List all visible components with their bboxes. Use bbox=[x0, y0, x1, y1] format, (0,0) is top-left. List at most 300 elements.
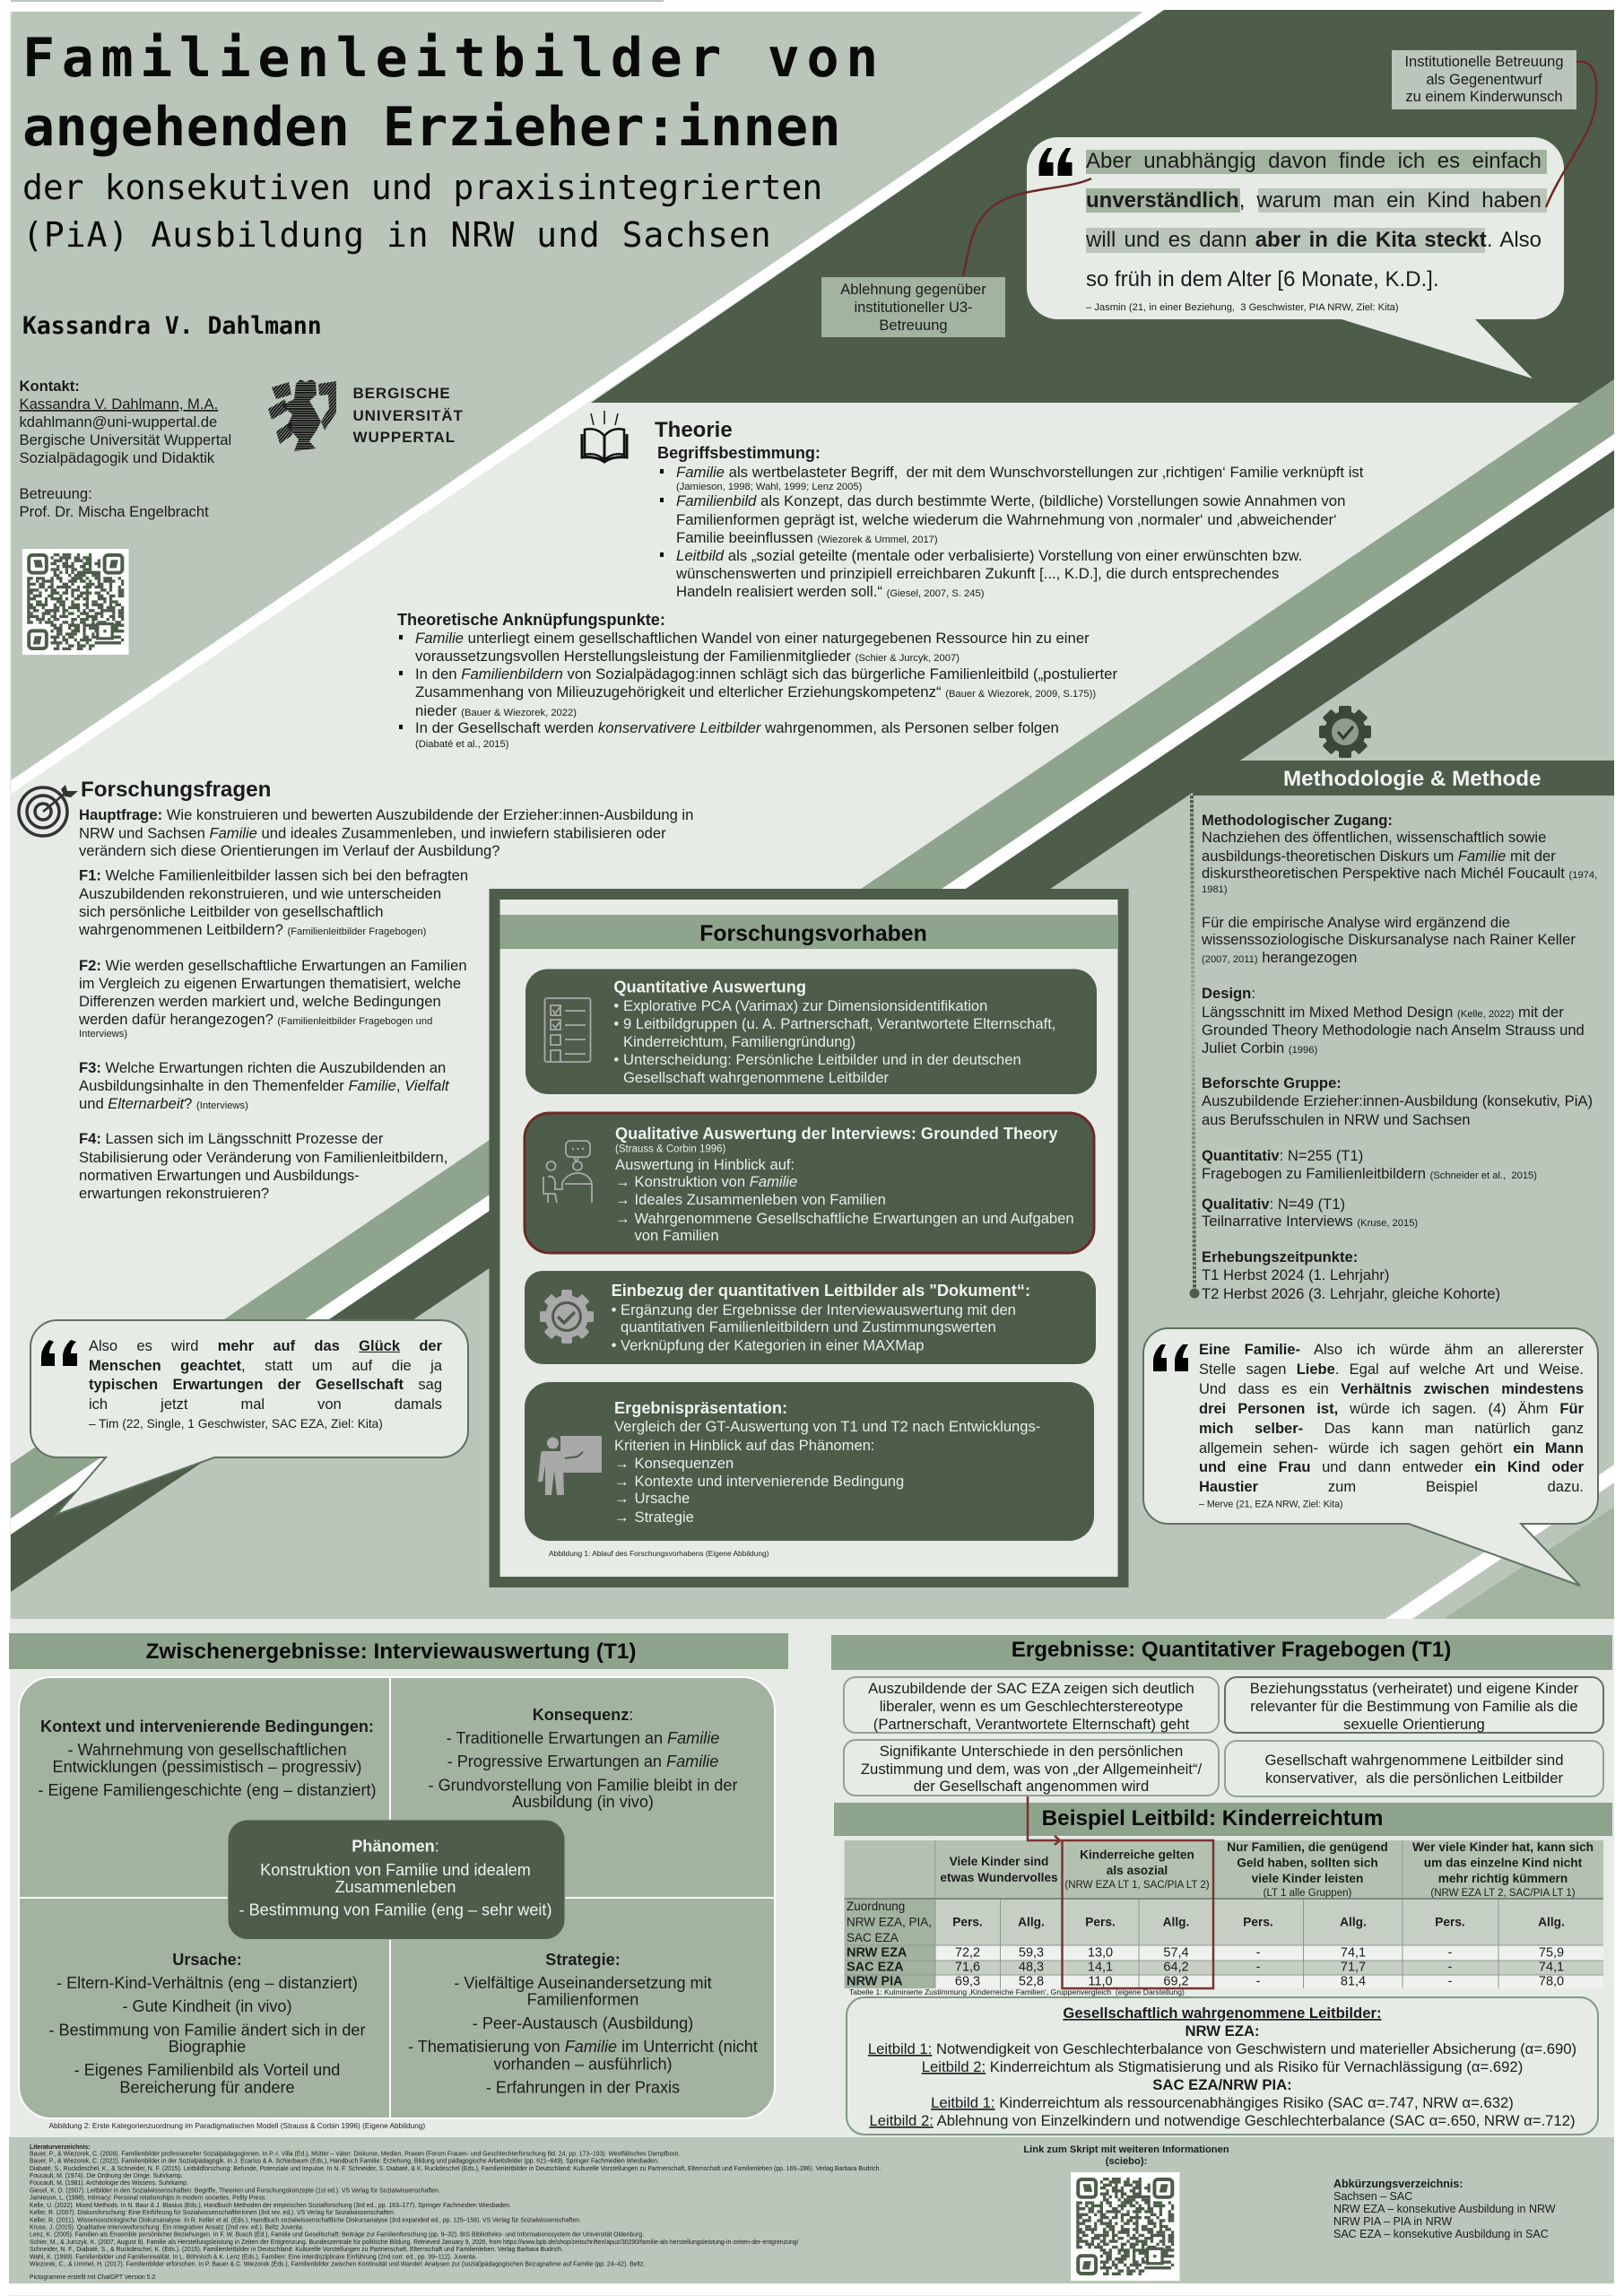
annotation: Ablehnung U3-Betreuung bbox=[821, 277, 1005, 337]
box: Quantitative Auswertung: Gesellschaft wahrgenommene Leitbilder bbox=[623, 1069, 890, 1086]
panel: Methodologie text: Qualitativ: N=49 (T1) bbox=[1202, 1196, 1345, 1213]
panel: Forschungsfragen: wahrgenommenen Leitbildern? (Familienleitbilder Fragebogen) bbox=[78, 921, 427, 938]
heading: Beispiel Leitbild bbox=[834, 1803, 1612, 1836]
box: Qualitative Auswertung: → bbox=[615, 1173, 630, 1190]
quote bubble: Jasmin: – Jasmin (21, in einer Beziehung, 3 Geschwister, PIA NRW, Ziel: Kita) bbox=[1086, 302, 1399, 313]
panel: Ergebnisse Quantitativer Fragebogen bbox=[831, 1635, 1612, 1796]
finding box B: sexuelle Orientierung bbox=[1343, 1716, 1485, 1733]
box: Quantitative Auswertung: Explorative PCA (Varimax) zur Dimensionsidentifikation bbox=[623, 997, 987, 1014]
box: Ergebnispräsentation: → bbox=[614, 1473, 630, 1490]
table: Kinderreichtum: etwas Wundervolles bbox=[940, 1871, 1058, 1884]
box: Einbezug: quantitativen Familienleitbildern und Zustimmungswerten bbox=[621, 1318, 996, 1335]
arrow: box C to highlighted column bbox=[1028, 1796, 1060, 1845]
table: Kinderreichtum: 69,3 bbox=[955, 1975, 980, 1989]
table: Kinderreichtum: Allg. bbox=[1538, 1916, 1565, 1929]
table: Kinderreichtum: Kinderreiche gelten bbox=[1080, 1848, 1194, 1862]
logo wordmark bbox=[353, 385, 464, 446]
panel: Forschungsfragen: sich persönliche Leitbilder von gesellschaftlich bbox=[79, 903, 383, 920]
quadrant: Kontext: Kontext und intervenierende Bedingungen: bbox=[40, 1718, 374, 1735]
panel: Methodologie text: (2007, 2011) herangezogen bbox=[1202, 949, 1357, 966]
quote bubble: Merve: Und dass es ein Verhältnis zwischen mindestens bbox=[1199, 1381, 1584, 1397]
footer: link heading: (sciebo): bbox=[1106, 2156, 1147, 2167]
panel: Theorie: Begriffsbestimmung: bbox=[657, 444, 821, 462]
quote bubble: Tim: ich jetzt mal von damals bbox=[89, 1396, 442, 1413]
panel: Forschungsfragen: normativen Erwartungen und Ausbildungs- bbox=[79, 1167, 360, 1184]
footer: Abkürzungsverzeichnis bbox=[1333, 2178, 1556, 2240]
box: Quantitative Auswertung: • bbox=[613, 1015, 623, 1032]
panel: Forschungsfragen: Stabilisierung oder Veränderung von Familienleitbildern, bbox=[79, 1149, 447, 1166]
centre box: Phänomen: Konstruktion von Familie und idealem bbox=[260, 1861, 531, 1879]
quadrant: Strategie bbox=[408, 1951, 758, 2097]
footer: Abkürzungsverzeichnis: Sachsen – SAC bbox=[1333, 2190, 1412, 2203]
logo wordmark: WUPPERTAL bbox=[353, 429, 456, 446]
panel: Methodologie text: Erhebungszeitpunkte: bbox=[1202, 1248, 1358, 1265]
title bbox=[22, 27, 885, 255]
centre box: Phänomen bbox=[228, 1820, 565, 1939]
table: Kinderreichtum: 74,1 bbox=[1539, 1961, 1564, 1975]
panel: Forschungsfragen: Ausbildungsinhalte in den Themenfelder Familie, Vielfalt bbox=[79, 1077, 450, 1094]
box: Ergebnispräsentation: Ursache bbox=[635, 1490, 690, 1507]
title: angehenden Erzieher:innen bbox=[22, 96, 841, 159]
box: Qualitative Auswertung bbox=[525, 1113, 1094, 1253]
table: Kinderreichtum: 71,7 bbox=[1341, 1961, 1366, 1975]
panel: Theorie: Familie beeinflussen (Wiezorek & Ummel, 2017) bbox=[676, 529, 938, 546]
quadrant: Kontext bbox=[38, 1718, 377, 1799]
box: Qualitative Auswertung: Qualitative Auswertung der Interviews: Grounded Theory bbox=[615, 1125, 1058, 1143]
caption: Tabelle 1: Tabelle 1: Kulminierte Zustimmung ‚Kinderreiche Familien‘, Gruppenvergleich (eigene Darstellung) bbox=[849, 1987, 1185, 1996]
panel: Theorie: Handeln realisiert werden soll.“ (Giesel, 2007, S. 245) bbox=[676, 583, 985, 600]
box: Quantitative Auswertung: Quantitative Auswertung bbox=[613, 978, 806, 996]
icon: target bbox=[19, 785, 78, 836]
panel: Methodologie text: Quantitativ: N=255 (T1) bbox=[1202, 1147, 1363, 1164]
quadrant: Konsequenz: - Progressive Erwartungen an Familie bbox=[447, 1752, 718, 1770]
quote bubble: Merve: – Merve (21, EZA NRW, Ziel: Kita) bbox=[1199, 1500, 1343, 1510]
annotation: Institutionelle Betreuung: Institutionelle Betreuung bbox=[1404, 54, 1564, 70]
panel: Forschungsvorhaben: Forschungsvorhaben bbox=[699, 922, 927, 946]
contact block: Bergische Universität Wuppertal bbox=[20, 431, 231, 448]
centre box: Phänomen: Phänomen: bbox=[352, 1837, 439, 1855]
text block: Theoretische Anknüpfungspunkte: voraussetzungsvollen Herstellungsleistung der Familienmitglieder (Schier & Jurcyk, 2007) bbox=[415, 648, 960, 665]
table: Kinderreichtum: - bbox=[1256, 1975, 1261, 1989]
table: Kinderreichtum: als asozial bbox=[1107, 1864, 1168, 1877]
footer: link heading bbox=[1023, 2144, 1229, 2167]
quadrant: Strategie: vorhanden – ausführlich) bbox=[493, 2056, 673, 2074]
quadrant: Ursache: - Eigenes Familienbild als Vorteil und bbox=[74, 2061, 340, 2079]
annotation: Ablehnung U3-Betreuung: Betreuung bbox=[879, 317, 948, 334]
finding box D: Gesellschaft wahrgenommene Leitbilder sind bbox=[1264, 1752, 1564, 1769]
quadrant: Ursache: Biographie bbox=[169, 2038, 246, 2056]
box: Qualitative Auswertung: von Familien bbox=[635, 1227, 719, 1244]
footer: Literaturverzeichnis: Bauer, P., & Wiezorek, C. (2022). Familienbilder in der Sozialpädagogik. In J. Ecarius & A. Schierbaum (Eds.), Handbuch Familie: Erziehung, Bildung und pädagogische Arbeitsfelder (pp. 621–649). Springer Fachmedien Wiesbaden. bbox=[30, 2159, 659, 2165]
footer: Literaturverzeichnis: Bauer, P., & Wiezorek, C. (2009). Familienbilder professioneller Sozialpädagoginnen. In P.-I. Villa (Ed.), Mütter – Väter: Diskurse, Medien, Praxen (Forum Frauen- und Geschlechterforschung Bd. 24, pp. 173–193). Westfälisches Dampfboot. bbox=[30, 2151, 680, 2157]
box: Einbezug: Verknüpfung der Kategorien in einer MAXMap bbox=[621, 1336, 925, 1354]
box: Qualitative Auswertung: Ideales Zusammenleben von Familien bbox=[635, 1191, 886, 1208]
panel: Theorie bbox=[582, 411, 1364, 600]
footer: link heading: Link zum Skript mit weiteren Informationen bbox=[1023, 2144, 1229, 2155]
box: Ergebnispräsentation: Konsequenzen bbox=[635, 1455, 734, 1472]
panel: Methodologie text: diskurstheoretischen Perspektive nach Michél Foucault (1974, bbox=[1202, 865, 1597, 882]
annotation: Ablehnung U3-Betreuung: Ablehnung gegenüber bbox=[840, 282, 986, 298]
panel: Forschungsfragen: F3: Welche Erwartungen richten die Auszubildenden an bbox=[79, 1059, 446, 1076]
table: Kinderreichtum: 75,9 bbox=[1539, 1946, 1564, 1961]
panel: Gesellschaftlich wahrgenommene Leitbilder: Leitbild 1: Kinderreichtum als ressourcenabhängiges Risiko (SAC α=.747, NRW α=.632) bbox=[931, 2094, 1514, 2111]
panel: Forschungsfragen: F4: Lassen sich im Längsschnitt Prozesse der bbox=[79, 1130, 384, 1147]
table: Kinderreichtum: Viele Kinder sind bbox=[950, 1855, 1048, 1868]
finding box D: konservativer, als die persönlichen Leitbilder bbox=[1265, 1770, 1563, 1787]
table: Kinderreichtum: mehr richtig kümmern bbox=[1438, 1872, 1568, 1885]
panel: Gesellschaftlich wahrgenommene Leitbilder: SAC EZA/NRW PIA: bbox=[1152, 2076, 1292, 2093]
finding box A: (Partnerschaft, Verantwortete Elternschaft) geht bbox=[873, 1716, 1190, 1733]
box: Einbezug bbox=[525, 1271, 1096, 1364]
panel: Forschungsfragen: Differenzen werden markiert und, welche Bedingungen bbox=[79, 993, 441, 1010]
text block: Theoretische Anknüpfungspunkte: In den Familienbildern von Sozialpädagog:innen schlägt sich das bürgerliche Familienleitbild („postulierter bbox=[415, 665, 1117, 683]
table: Kinderreichtum: NRW PIA bbox=[847, 1975, 903, 1989]
finding box B bbox=[1225, 1677, 1603, 1733]
quadrant: Strategie: - Peer-Austausch (Ausbildung) bbox=[473, 2014, 693, 2032]
caption: Abbildung 2: Abbildung 2: Erste Kategorienzuordnung im Paradigmatischen Modell (Strauss & Corbin 1996) (Eigene Abbildung) bbox=[48, 2121, 425, 2130]
box: Einbezug: • bbox=[612, 1301, 617, 1318]
finding box D bbox=[1225, 1741, 1603, 1796]
table: Kinderreichtum: Geld haben, sollten sich bbox=[1237, 1857, 1378, 1870]
quadrant: Konsequenz: Ausbildung (in vivo) bbox=[512, 1793, 654, 1811]
table: Kinderreichtum: - bbox=[1256, 1961, 1261, 1975]
panel: Gesellschaftlich wahrgenommene Leitbilder: NRW EZA: bbox=[1185, 2022, 1260, 2039]
footer: Literaturverzeichnis: Diabaté, S., Ruckdeschel, K., & Schneider, N. F. (2015). Leitbildforschung: Befunde, Potenziale und Impulse. In N. F. Schneider, S. Diabaté, & K. Ruckdeschel (Eds.), Familienleitbilder in Deutschland: Kulturelle Vorstellungen zu Partnerschaft, Elternschaft und Familienleben (pp. 169–286). Verlag Barbara Budrich. bbox=[30, 2166, 881, 2172]
quadrant: Konsequenz: Konsequenz: bbox=[533, 1706, 633, 1724]
panel: Forschungsfragen: erwartungen rekonstruieren? bbox=[79, 1185, 269, 1202]
finding box B: relevanter für die Bestimmung von Familie als die bbox=[1250, 1698, 1578, 1715]
footer: Literaturverzeichnis: Schneider, N. F., Diabaté, S., & Ruckdeschel, K. (Eds.). (2015). Familienleitbilder in Deutschland: Kulturelle Vorstellungen zu Partnerschaft, Elternschaft und Familienleben. Verlag Barbara Budrich. bbox=[30, 2247, 563, 2253]
title: (PiA) Ausbildung in NRW und Sachsen bbox=[22, 215, 772, 255]
panel: Gesellschaftlich wahrgenommene Leitbilder: Leitbild 2: Ablehnung von Einzelkindern und notwendige Geschlechterbalance (SAC α=.650, NRW α=.712) bbox=[869, 2112, 1576, 2129]
table: Kinderreichtum: - bbox=[1256, 1946, 1261, 1961]
table: Kinderreichtum: 57,4 bbox=[1163, 1946, 1189, 1961]
table: Kinderreichtum: 11,0 bbox=[1088, 1975, 1113, 1989]
panel: Forschungsfragen: im Vergleich zu eigenen Erwartungen thematisiert, welche bbox=[79, 975, 461, 992]
table: Kinderreichtum: Zuordnung bbox=[847, 1900, 905, 1913]
quote bubble: Jasmin bbox=[1027, 137, 1564, 378]
finding box C: Signifikante Unterschiede in den persönlichen bbox=[880, 1743, 1183, 1760]
table: Kinderreichtum: Pers. bbox=[1435, 1916, 1465, 1929]
quote bubble: Merve: mich selber- Das kann man natürlich ganz bbox=[1199, 1421, 1584, 1437]
table: Kinderreichtum: 78,0 bbox=[1539, 1975, 1564, 1989]
footer: Literaturverzeichnis: Foucault, M. (1974). Die Ordnung der Dinge. Suhrkamp. bbox=[30, 2173, 183, 2179]
annotation: Institutionelle Betreuung: als Gegenentwurf bbox=[1426, 72, 1542, 88]
box: Quantitative Auswertung: Kinderreichtum, Familiengründung) bbox=[623, 1033, 855, 1050]
annotation: Ablehnung U3-Betreuung: institutioneller U3- bbox=[854, 300, 973, 316]
quote bubble: Jasmin: Aber unabhängig davon finde ich es einfach bbox=[1086, 149, 1541, 173]
table: Kinderreichtum: 52,8 bbox=[1019, 1975, 1044, 1989]
text block: Theoretische Anknüpfungspunkte: In der Gesellschaft werden konservativere Leitbilder wahrgenommen, als Personen selber folgen bbox=[415, 719, 1059, 736]
panel: Methodologie text: T1 Herbst 2024 (1. Lehrjahr) bbox=[1202, 1266, 1389, 1283]
quadrant: Strategie: - Vielfältige Auseinandersetzung mit bbox=[454, 1974, 712, 1992]
table: Kinderreichtum bbox=[845, 1840, 1603, 1989]
panel: Methodologie text: Für die empirische Analyse wird ergänzend die bbox=[1202, 914, 1510, 931]
table: Kinderreichtum: 59,3 bbox=[1019, 1946, 1044, 1961]
quote bubble: Tim: typischen Erwartungen der Gesellschaft sag bbox=[89, 1377, 442, 1393]
quadrant: Strategie: - Thematisierung von Familie im Unterricht (nicht bbox=[408, 2038, 758, 2056]
table: Kinderreichtum: SAC EZA bbox=[847, 1961, 904, 1975]
footer: Literaturverzeichnis: Kelle, U. (2022). Mixed Methods. In N. Baur & J. Blasius (Eds.), Handbuch Methoden der empirischen Sozialforschung (3rd ed., pp. 163–177). Springer Fachmedien Wiesbaden. bbox=[30, 2203, 511, 2209]
text block: Theoretische Anknüpfungspunkte: Zusammenhang von Milieuzugehörigkeit und elterlicher Erziehungskompetenz“ (Bauer & Wiezorek, 2009, S.175)) bbox=[415, 683, 1096, 700]
quote bubble: Merve: drei Personen ist, würde ich sagen. (4) Ähm Für bbox=[1199, 1401, 1584, 1417]
QR code: contact bbox=[22, 549, 129, 655]
box: Quantitative Auswertung: • bbox=[613, 997, 623, 1014]
quadrant: Kontext: Entwicklungen (pessimistisch – progressiv) bbox=[53, 1758, 361, 1776]
panel: Forschungsfragen bbox=[19, 778, 693, 1202]
footer: Literaturverzeichnis: Wiezorek, C., & Ummel, H. (2017). Familienbilder erforschen. In P. Bauer & C. Wiezorek (Eds.), Familienbilder zwischen Kontinuität und Wandel: Analysen zur (sozial)pädagogischen Bezugnahme auf Familie (pp. 24–42). Beltz. bbox=[30, 2262, 645, 2267]
contact block: Betreuung: bbox=[20, 485, 92, 502]
table: Kinderreichtum: NRW EZA, PIA, bbox=[847, 1916, 932, 1929]
panel: Forschungsfragen: Auszubildenden rekonstruieren, und wie unterscheiden bbox=[79, 885, 441, 902]
contact block: Sozialpädagogik und Didaktik bbox=[20, 449, 215, 466]
quote bubble: Merve: allgemein sehen- würde ich sagen gehört ein Mann bbox=[1199, 1440, 1584, 1457]
footer: Literaturverzeichnis: Keller, R. (2011). Wissenssoziologische Diskursanalyse. In R. Keller et al. (Eds.), Handbuch sozialwissenschaftliche Diskursanalyse (3rd expanded ed., pp. 125–158). VS Verlag für Sozialwissenschaften. bbox=[30, 2217, 581, 2223]
table: Kinderreichtum: 48,3 bbox=[1019, 1961, 1044, 1975]
panel: Theorie: Familienformen geprägt ist, welche wiederum die Wahrnehmung von ‚normaler‘ und ‚abweichender‘ bbox=[676, 511, 1337, 528]
table: Kinderreichtum: - bbox=[1448, 1975, 1453, 1989]
table: Kinderreichtum: 71,6 bbox=[955, 1961, 980, 1975]
box: Ergebnispräsentation: Vergleich der GT-Auswertung von T1 und T2 nach Entwicklungs- bbox=[614, 1418, 1040, 1435]
panel: Forschungsfragen: Interviews) bbox=[79, 1029, 127, 1039]
box: Einbezug: Ergänzung der Ergebnisse der Interviewauswertung mit den bbox=[621, 1301, 1016, 1318]
quote bubble: Jasmin: unverständlich, warum man ein Kind haben bbox=[1086, 188, 1541, 213]
quadrant: Strategie: - Erfahrungen in der Praxis bbox=[486, 2079, 680, 2097]
panel: Forschungsfragen: F1: Welche Familienleitbilder lassen sich bei den befragten bbox=[79, 866, 468, 884]
annotation: Institutionelle Betreuung bbox=[1392, 50, 1576, 109]
panel: Methodologie text: Auszubildende Erzieher:innen-Ausbildung (konsekutiv, PiA) bbox=[1202, 1092, 1593, 1109]
panel: Methodologie text: Juliet Corbin (1996) bbox=[1202, 1039, 1317, 1057]
title: der konsekutiven und praxisintegrierten bbox=[22, 168, 822, 207]
box: Qualitative Auswertung: Wahrgenommene Gesellschaftliche Erwartungen an und Aufgaben bbox=[635, 1210, 1074, 1227]
table: Kinderreichtum: Pers. bbox=[952, 1916, 983, 1929]
panel: Theorie: Familie als wertbelasteter Begriff, der mit dem Wunschvorstellungen zur ‚richtigen‘ Familie verknüpft ist bbox=[676, 464, 1364, 481]
quadrant: Konsequenz bbox=[429, 1706, 737, 1811]
quadrant: Konsequenz: - Traditionelle Erwartungen an Familie bbox=[447, 1729, 719, 1747]
panel: Methodologie text: Methodologischer Zugang: bbox=[1202, 812, 1393, 829]
table: Kinderreichtum: Wer viele Kinder hat, kann sich bbox=[1412, 1840, 1594, 1854]
footer: Abkürzungsverzeichnis: Abkürzungsverzeichnis: bbox=[1333, 2178, 1463, 2190]
footer: Literaturverzeichnis: Giesel, K. D. (2007). Leitbilder in den Sozialwissenschaften: Begriffe, Theorien und Forschungskonzepte (1st ed.). VS Verlag für Sozialwissenschaften. bbox=[30, 2187, 440, 2194]
finding box B: Beziehungsstatus (verheiratet) und eigene Kinder bbox=[1250, 1680, 1579, 1697]
icon: university lion logo bbox=[268, 379, 336, 451]
quote bubble: Merve: Stelle sagen Liebe. Egal auf welche Art und Weise. bbox=[1199, 1361, 1584, 1378]
panel: Forschungsvorhaben bbox=[495, 894, 1123, 1582]
footer: Literaturverzeichnis: Schier, M., & Jurczyk, K. (2007, August 9). Familie als Herstellungsleistung in Zeiten der Entgrenzung. Bundeszentrale für politische Bildung. Retrieved January 9, 2026, from https://www.bpb.de/shop/zeitschriften/apuz/30290/familie-als-herstellungsleistung-in-zeiten-der-entgrenzung/ bbox=[30, 2239, 799, 2246]
panel: Methodologie text bbox=[1189, 796, 1597, 1302]
finding box A bbox=[844, 1677, 1219, 1733]
box: Qualitative Auswertung: → bbox=[615, 1191, 630, 1208]
box: Ergebnispräsentation: Strategie bbox=[635, 1509, 694, 1526]
quadrant: Strategie: Strategie: bbox=[545, 1951, 621, 1969]
panel: Ergebnisse Quantitativer Fragebogen: Ergebnisse: Quantitativer Fragebogen (T1) bbox=[1012, 1638, 1451, 1662]
centre box: Phänomen: Zusammenleben bbox=[335, 1878, 456, 1896]
quote bubble: Merve: und eine Frau und dann entweder ein Kind oder bbox=[1199, 1459, 1584, 1475]
box: Ergebnispräsentation: → bbox=[614, 1509, 630, 1526]
box: Quantitative Auswertung: 9 Leitbildgruppen (u. A. Partnerschaft, Verantwortete Elternschaft, bbox=[623, 1015, 1055, 1032]
table: Kinderreichtum: 69,2 bbox=[1163, 1975, 1189, 1989]
quote bubble: Tim bbox=[30, 1320, 468, 1515]
footer: Literaturverzeichnis: Literaturverzeichnis: bbox=[30, 2144, 90, 2151]
panel: Zwischenergebnisse: Zwischenergebnisse: Interviewauswertung (T1) bbox=[146, 1639, 636, 1664]
panel: Zwischenergebnisse bbox=[9, 1633, 788, 2130]
table: Kinderreichtum: um das einzelne Kind nicht bbox=[1424, 1857, 1583, 1870]
text block: Theoretische Anknüpfungspunkte: Theoretische Anknüpfungspunkte: bbox=[397, 611, 665, 629]
quote bubble: Jasmin: so früh in dem Alter [6 Monate, K.D.]. bbox=[1086, 267, 1439, 291]
table: Kinderreichtum: (LT 1 alle Gruppen) bbox=[1264, 1888, 1351, 1899]
footer: Abkürzungsverzeichnis: SAC EZA – konsekutive Ausbildung in SAC bbox=[1333, 2228, 1549, 2240]
quadrant: Ursache: Bereicherung für andere bbox=[119, 2079, 295, 2097]
quote bubble: Tim: Also es wird mehr auf das Glück der bbox=[89, 1338, 442, 1354]
panel: Methodologie text: Nachziehen des öffentlichen, wissenschaftlich sowie bbox=[1202, 829, 1546, 846]
box: Qualitative Auswertung: → bbox=[615, 1210, 630, 1227]
quadrant: Konsequenz: - Grundvorstellung von Familie bleibt in der bbox=[429, 1776, 737, 1794]
panel: Theorie: Theorie bbox=[655, 418, 733, 442]
box: Ergebnispräsentation bbox=[525, 1382, 1094, 1541]
contact block: kdahlmann@uni-wuppertal.de bbox=[20, 413, 217, 430]
panel: Forschungsfragen: werden dafür herangezogen? (Familienleitbilder Fragebogen und bbox=[78, 1011, 432, 1028]
finding box A: liberaler, wenn es um Geschlechterstereotype bbox=[880, 1698, 1183, 1715]
panel: Gesellschaftlich wahrgenommene Leitbilder bbox=[847, 1997, 1598, 2135]
quadrant: Ursache: - Eltern-Kind-Verhältnis (eng – distanziert) bbox=[56, 1974, 358, 1992]
box: Qualitative Auswertung: Konstruktion von Familie bbox=[635, 1173, 797, 1190]
quadrant: Kontext: - Eigene Familiengeschichte (eng – distanziert) bbox=[38, 1781, 377, 1799]
connector lines bbox=[963, 62, 1596, 276]
quadrant: Ursache: Ursache: bbox=[172, 1951, 242, 1969]
quadrant: Ursache bbox=[49, 1951, 365, 2097]
contact block: Prof. Dr. Mischa Engelbracht bbox=[20, 503, 209, 520]
table: Kinderreichtum: 13,0 bbox=[1088, 1946, 1113, 1961]
table: Kinderreichtum: Allg. bbox=[1340, 1916, 1367, 1929]
footer: Literaturverzeichnis: Wahl, K. (1999). Familienbilder und Familienrealität. In L. Böhnisch & K. Lenz (Eds.), Familien: Eine interdisziplinäre Einführung (2nd corr. ed., pp. 99–112). Juventa. bbox=[30, 2254, 477, 2260]
panel: Forschungsfragen: Hauptfrage: Wie konstruieren und bewerten Auszubildende der Erzieher:innen-Ausbildung in bbox=[79, 806, 693, 823]
panel: Forschungsfragen: Forschungsfragen bbox=[81, 778, 271, 802]
footer: Literaturverzeichnis: Foucault, M. (1981). Archäologie des Wissens. Suhrkamp. bbox=[30, 2180, 188, 2187]
panel: Methodologie text: wissenssoziologische Diskursanalyse nach Rainer Keller bbox=[1201, 931, 1576, 948]
panel: Methodologie text: ausbildungs-theoretischen Diskurs um Familie mit der bbox=[1202, 848, 1556, 865]
annotation: Institutionelle Betreuung: zu einem Kinderwunsch bbox=[1405, 89, 1563, 105]
author: Kassandra V. Dahlmann bbox=[22, 312, 322, 340]
finding box C bbox=[844, 1740, 1219, 1796]
table: Kinderreichtum: - bbox=[1448, 1946, 1453, 1961]
box: Ergebnispräsentation: → bbox=[614, 1490, 630, 1507]
panel: Gesellschaftlich wahrgenommene Leitbilder: Gesellschaftlich wahrgenommene Leitbilder: bbox=[1063, 2005, 1382, 2022]
footer: Literaturverzeichnis: Kruse, J. (2015). Qualitative Interviewforschung: Ein integrativer Ansatz (2nd rev. ed.). Beltz Juventa. bbox=[30, 2224, 304, 2231]
quadrant: Strategie: Familienformen bbox=[527, 1991, 638, 2009]
text block: Theoretische Anknüpfungspunkte bbox=[397, 611, 1117, 750]
table: Kinderreichtum: viele Kinder leisten bbox=[1252, 1872, 1363, 1885]
panel: Forschungsfragen: F2: Wie werden gesellschaftliche Erwartungen an Familien bbox=[79, 957, 467, 974]
heading: Methodologie & Methode: Methodologie & Methode bbox=[1283, 767, 1541, 791]
QR code: sciebo bbox=[1071, 2172, 1180, 2281]
panel: Methodologie text: Beforschte Gruppe: bbox=[1202, 1074, 1342, 1091]
text block: Theoretische Anknüpfungspunkte: nieder (Bauer & Wiezorek, 2022) bbox=[415, 702, 577, 719]
panel: Forschungsfragen: NRW und Sachsen Familie und ideales Zusammenleben, und inwiefern stabilisieren oder bbox=[79, 825, 666, 841]
panel: Theorie: wünschenswerten und prinzipiell erreichbaren Zukunft [..., K.D.], die durch entsprechendes bbox=[675, 565, 1279, 582]
logo wordmark: UNIVERSITÄT bbox=[353, 407, 464, 424]
icon: methodology gear bbox=[1319, 706, 1371, 758]
box: Einbezug: • bbox=[612, 1336, 617, 1354]
centre box: Phänomen: - Bestimmung von Familie (eng – sehr weit) bbox=[239, 1901, 551, 1919]
box: Qualitative Auswertung: (Strauss & Corbin 1996) bbox=[615, 1144, 726, 1155]
panel: Methodologie text: aus Berufsschulen in NRW und Sachsen bbox=[1202, 1111, 1470, 1128]
panel: Gesellschaftlich wahrgenommene Leitbilder: Leitbild 2: Kinderreichtum als Stigmatisierung und als Risiko für Vernachlässigung (α=.692) bbox=[922, 2058, 1523, 2075]
finding box A: Auszubildende der SAC EZA zeigen sich deutlich bbox=[868, 1680, 1194, 1697]
panel: Theorie: Leitbild als „sozial geteilte (mentale oder verbalisierte) Vorstellung von einer erwünschten bzw. bbox=[676, 547, 1302, 564]
box: Qualitative Auswertung: Auswertung in Hinblick auf: bbox=[615, 1156, 795, 1173]
box: Ergebnispräsentation: → bbox=[614, 1455, 630, 1472]
box: Einbezug: Einbezug der quantitativen Leitbilder als "Dokument“: bbox=[612, 1282, 1030, 1300]
table: Kinderreichtum: Pers. bbox=[1085, 1916, 1116, 1929]
text block: Theoretische Anknüpfungspunkte: (Diabaté et al., 2015) bbox=[415, 739, 509, 750]
box: Quantitative Auswertung bbox=[525, 969, 1097, 1094]
table: Kinderreichtum: 72,2 bbox=[955, 1946, 980, 1961]
quadrant: Kontext: - Wahrnehmung von gesellschaftlichen bbox=[67, 1741, 347, 1759]
table: Kinderreichtum: Allg. bbox=[1163, 1916, 1189, 1929]
box: Quantitative Auswertung: Unterscheidung: Persönliche Leitbilder und in der deutschen bbox=[623, 1051, 1021, 1068]
footer: Literaturverzeichnis: Jamieson, L. (1998). Intimacy: Personal relationships in modern societies. Polity Press. bbox=[30, 2196, 266, 2202]
contact block: Kontakt: bbox=[20, 378, 80, 395]
panel: Methodologie text: Design: bbox=[1202, 985, 1255, 1002]
box: Quantitative Auswertung: • bbox=[613, 1051, 623, 1068]
quote bubble: Merve bbox=[1143, 1328, 1598, 1586]
quadrant: Ursache: - Gute Kindheit (in vivo) bbox=[122, 1997, 292, 2015]
finding box C: der Gesellschaft angenommen wird bbox=[914, 1778, 1149, 1795]
quote bubble: Merve: Haustier zum Beispiel dazu. bbox=[1199, 1479, 1584, 1495]
contact block bbox=[20, 378, 231, 520]
panel: Methodologie text: Längsschnitt im Mixed Method Design (Kelle, 2022) mit der bbox=[1202, 1004, 1564, 1021]
logo wordmark: BERGISCHE bbox=[353, 385, 451, 402]
panel: Theorie: Familienbild als Konzept, das durch bestimmte Werte, (bildliche) Vorstellungen sowie Annahmen von bbox=[676, 492, 1345, 509]
caption: Abbildung 1: Abbildung 1: Ablauf des Forschungsvorhabens (Eigene Abbildung) bbox=[549, 1549, 769, 1558]
table: Kinderreichtum: 74,1 bbox=[1341, 1946, 1366, 1961]
footer: Literaturverzeichnis: Keller, R. (2007). Diskursforschung: Eine Einführung für SozialwissenschaftlerInnen (3rd rev. ed.). VS Verlag für Sozialwissenschaften. bbox=[30, 2210, 395, 2216]
footer: Literaturverzeichnis bbox=[30, 2144, 881, 2281]
table: Kinderreichtum: 64,2 bbox=[1163, 1961, 1189, 1975]
footer: Abkürzungsverzeichnis: NRW PIA – PIA in NRW bbox=[1333, 2215, 1452, 2228]
panel: Methodologie text: Fragebogen zu Familienleitbildern (Schneider et al., 2015) bbox=[1202, 1165, 1537, 1182]
table: Kinderreichtum: Allg. bbox=[1018, 1916, 1045, 1929]
table: Kinderreichtum: 14,1 bbox=[1088, 1961, 1113, 1975]
table: Kinderreichtum: SAC EZA bbox=[847, 1931, 899, 1944]
quote bubble: Tim: – Tim (22, Single, 1 Geschwister, SAC EZA, Ziel: Kita) bbox=[89, 1417, 383, 1431]
panel: Methodologie text: T2 Herbst 2026 (3. Lehrjahr, gleiche Kohorte) bbox=[1202, 1285, 1500, 1302]
box: Ergebnispräsentation: Ergebnispräsentation: bbox=[614, 1399, 787, 1417]
table: Kinderreichtum: Nur Familien, die genügend bbox=[1227, 1840, 1388, 1854]
quote bubble: Jasmin: will und es dann aber in die Kita steckt. Also bbox=[1086, 228, 1541, 252]
box: Ergebnispräsentation: Kriterien in Hinblick auf das Phänomen: bbox=[614, 1437, 875, 1454]
contact block: Kassandra V. Dahlmann, M.A. bbox=[20, 396, 218, 413]
title: Familienleitbilder von bbox=[22, 27, 885, 90]
box: Ergebnispräsentation: Kontexte und intervenierende Bedingung bbox=[635, 1473, 904, 1490]
heading: Beispiel Leitbild: Beispiel Leitbild: Kinderreichtum bbox=[1042, 1806, 1383, 1831]
table: Kinderreichtum: (NRW EZA LT 1, SAC/PIA LT 2) bbox=[1064, 1880, 1210, 1891]
table: Kinderreichtum: Pers. bbox=[1243, 1916, 1273, 1929]
panel: Forschungsfragen: und Elternarbeit? (Interviews) bbox=[79, 1095, 248, 1112]
panel: Forschungsfragen: verändern sich diese Orientierungen im Verlauf der Ausbildung? bbox=[79, 842, 500, 859]
quote bubble: Merve: Eine Familie- Also ich würde ähm an allererster bbox=[1199, 1342, 1584, 1358]
panel: Gesellschaftlich wahrgenommene Leitbilder: Leitbild 1: Notwendigkeit von Geschlechterbalance von Geschwistern und materieller Absicherung (α=.690) bbox=[868, 2040, 1576, 2057]
icon: open book bbox=[582, 411, 627, 462]
quote bubble: Tim: Menschen geachtet, statt um auf die ja bbox=[89, 1358, 442, 1374]
table: Kinderreichtum: - bbox=[1448, 1961, 1453, 1975]
quadrant: Ursache: - Bestimmung von Familie ändert sich in der bbox=[49, 2022, 365, 2039]
panel: Methodologie text: Grounded Theory Methodologie nach Anselm Strauss und bbox=[1202, 1022, 1585, 1039]
finding box C: Zustimmung und dem, was von „der Allgemeinheit“/ bbox=[861, 1761, 1202, 1778]
footer: Abkürzungsverzeichnis: NRW EZA – konsekutive Ausbildung in NRW bbox=[1333, 2203, 1556, 2215]
footer: Literaturverzeichnis: Lenz, K. (2005). Familien als Ensemble persönlicher Beziehungen. In F. W. Busch (Ed.), Familie und Gesellschaft: Beiträge zur Familienforschung (pp. 9–32). BIS Bibliotheks- und Informationssystem der Universität Oldenburg. bbox=[30, 2232, 644, 2239]
panel: Methodologie text: 1981) bbox=[1202, 884, 1228, 895]
